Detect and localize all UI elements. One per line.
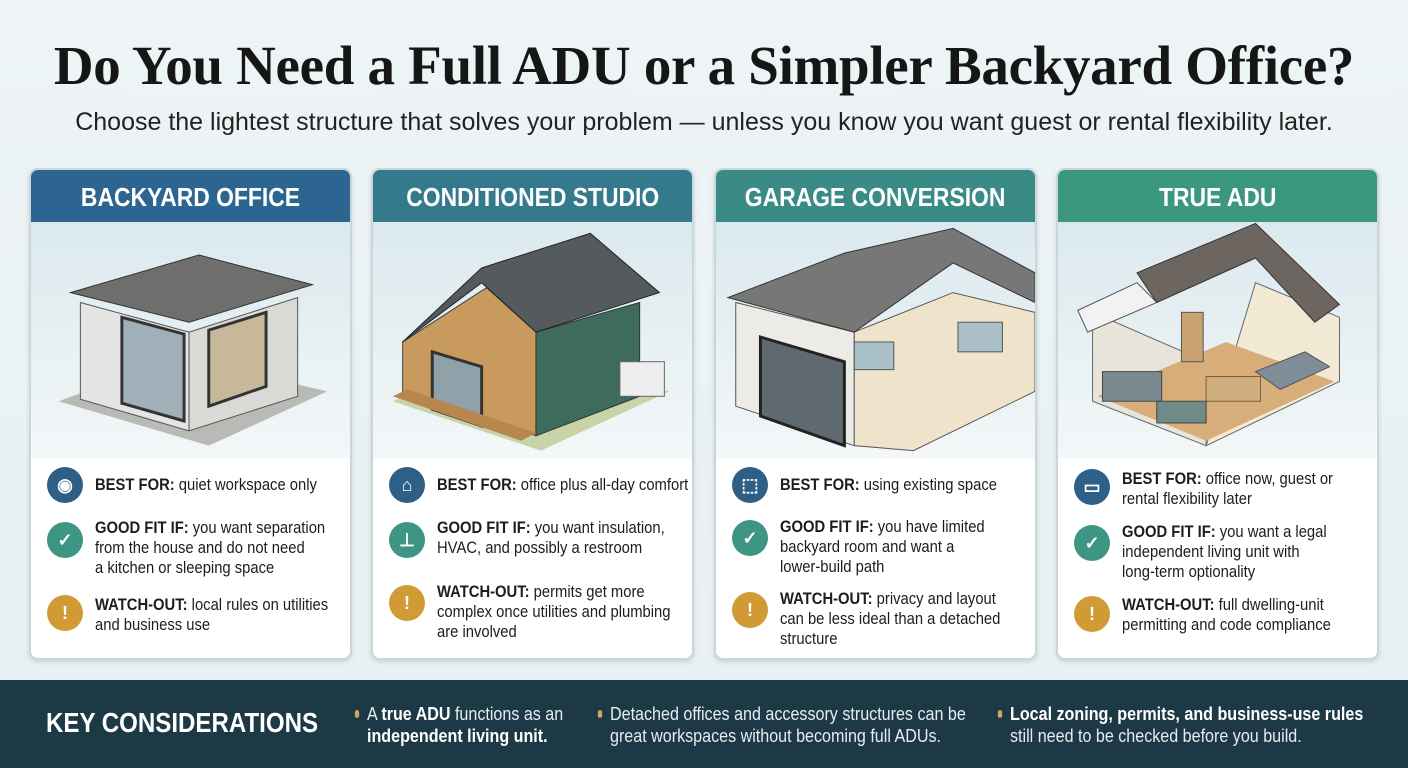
heading: garage conversion: GARAGE CONVERSION bbox=[745, 182, 1006, 212]
panel: garage conversion: ✓ bbox=[742, 528, 758, 548]
panel: true ADU: ! bbox=[1089, 604, 1095, 624]
subtitle: Choose the lightest structure that solves your problem — unless you know you want guest or rental flexibility later. bbox=[75, 108, 1333, 136]
good fit bbox=[732, 517, 985, 576]
panel: conditioned studio: are involved bbox=[437, 622, 517, 641]
panel: backyard office: a kitchen or sleeping space bbox=[95, 558, 274, 577]
panel: backyard office: ✓ bbox=[57, 530, 73, 550]
panel: true ADU: ✓ bbox=[1084, 533, 1100, 553]
watch-out bbox=[389, 582, 670, 641]
panel: conditioned studio bbox=[371, 168, 694, 660]
panel: true ADU: WATCH-OUT: full dwelling-unit bbox=[1122, 595, 1324, 614]
panel: conditioned studio: WATCH-OUT: permits get more bbox=[437, 582, 645, 601]
heading: conditioned studio: CONDITIONED STUDIO bbox=[406, 182, 659, 212]
panel: backyard office: GOOD FIT IF: you want separation bbox=[95, 518, 325, 537]
panel: true ADU bbox=[1056, 168, 1379, 660]
panel: garage conversion: ! bbox=[747, 600, 753, 620]
panel: true ADU: BEST FOR: office now, guest or bbox=[1122, 469, 1333, 488]
point 3: still need to be checked before you build. bbox=[1010, 725, 1302, 746]
point 1: independent living unit. bbox=[367, 725, 548, 746]
panel: conditioned studio: HVAC, and possibly a restroom bbox=[437, 538, 642, 557]
panel: conditioned studio: ! bbox=[404, 593, 410, 613]
panel: backyard office: ! bbox=[62, 603, 68, 623]
panel: conditioned studio: ⌂ bbox=[402, 475, 412, 495]
point 2: Detached offices and accessory structures can be bbox=[610, 703, 966, 724]
point 3 bbox=[1010, 703, 1393, 747]
good fit bbox=[47, 518, 325, 577]
panel: true ADU: ▭ bbox=[1083, 477, 1100, 497]
best for bbox=[47, 467, 317, 503]
panel: conditioned studio: ⊥ bbox=[399, 530, 415, 550]
panel: true ADU: independent living unit with bbox=[1122, 542, 1300, 561]
watch-out bbox=[1074, 595, 1331, 634]
panel: backyard office: and business use bbox=[95, 615, 210, 634]
point 2 bbox=[610, 703, 993, 747]
watch-out bbox=[47, 595, 328, 634]
heading: backyard office bbox=[31, 170, 350, 222]
point 1 bbox=[367, 703, 593, 747]
heading: backyard office: BACKYARD OFFICE bbox=[81, 182, 300, 212]
panel: true ADU: GOOD FIT IF: you want a legal bbox=[1122, 522, 1327, 541]
panel: true ADU: permitting and code compliance bbox=[1122, 615, 1331, 634]
panel: garage conversion: WATCH-OUT: privacy and layout bbox=[780, 589, 996, 608]
panel: garage conversion: GOOD FIT IF: you have limited bbox=[780, 517, 985, 536]
illustration: backyard office shed bbox=[31, 222, 350, 458]
point 2: great workspaces without becoming full ADUs. bbox=[610, 725, 941, 746]
panel: garage conversion: can be less ideal than a detached bbox=[780, 609, 1000, 628]
good fit bbox=[1074, 522, 1327, 581]
panel: backyard office: WATCH-OUT: local rules on utilities bbox=[95, 595, 328, 614]
panel: backyard office bbox=[29, 168, 352, 660]
panel: garage conversion: ⬚ bbox=[741, 475, 758, 495]
panel: conditioned studio: BEST FOR: office plus all-day comfort bbox=[437, 475, 688, 494]
point 1: A true ADU functions as an bbox=[367, 703, 563, 724]
panel: garage conversion: lower-build path bbox=[780, 557, 884, 576]
panel: backyard office: ◉ bbox=[57, 475, 73, 495]
illustration: studio bbox=[373, 222, 692, 458]
panel: conditioned studio: complex once utilities and plumbing bbox=[437, 602, 670, 621]
best for bbox=[732, 467, 997, 503]
good fit bbox=[389, 518, 665, 558]
heading: true ADU: TRUE ADU bbox=[1159, 182, 1276, 212]
best for bbox=[389, 467, 688, 503]
heading: conditioned studio bbox=[373, 170, 692, 222]
key considerations bar bbox=[0, 680, 1408, 768]
watch-out bbox=[732, 589, 1000, 648]
illustration: ADU cutaway bbox=[1058, 222, 1377, 458]
heading: key considerations: KEY CONSIDERATIONS bbox=[46, 707, 318, 738]
panel: backyard office: BEST FOR: quiet workspace only bbox=[95, 475, 317, 494]
title: Do You Need a Full ADU or a Simpler Backyard Office? bbox=[54, 35, 1354, 96]
panel: true ADU: rental flexibility later bbox=[1122, 489, 1252, 508]
panel: garage conversion bbox=[714, 168, 1037, 660]
panel: garage conversion: backyard room and want a bbox=[780, 537, 954, 556]
panel: garage conversion: BEST FOR: using existing space bbox=[780, 475, 997, 494]
heading: true ADU bbox=[1058, 170, 1377, 222]
point 3: Local zoning, permits, and business-use rules bbox=[1010, 703, 1363, 724]
illustration: garage bbox=[716, 222, 1035, 458]
heading: garage conversion bbox=[716, 170, 1035, 222]
panel: true ADU: long-term optionality bbox=[1122, 562, 1255, 581]
panel: backyard office: from the house and do not need bbox=[95, 538, 305, 557]
panel: conditioned studio: GOOD FIT IF: you want insulation, bbox=[437, 518, 665, 537]
panel: garage conversion: structure bbox=[780, 629, 838, 648]
best for bbox=[1074, 469, 1333, 508]
